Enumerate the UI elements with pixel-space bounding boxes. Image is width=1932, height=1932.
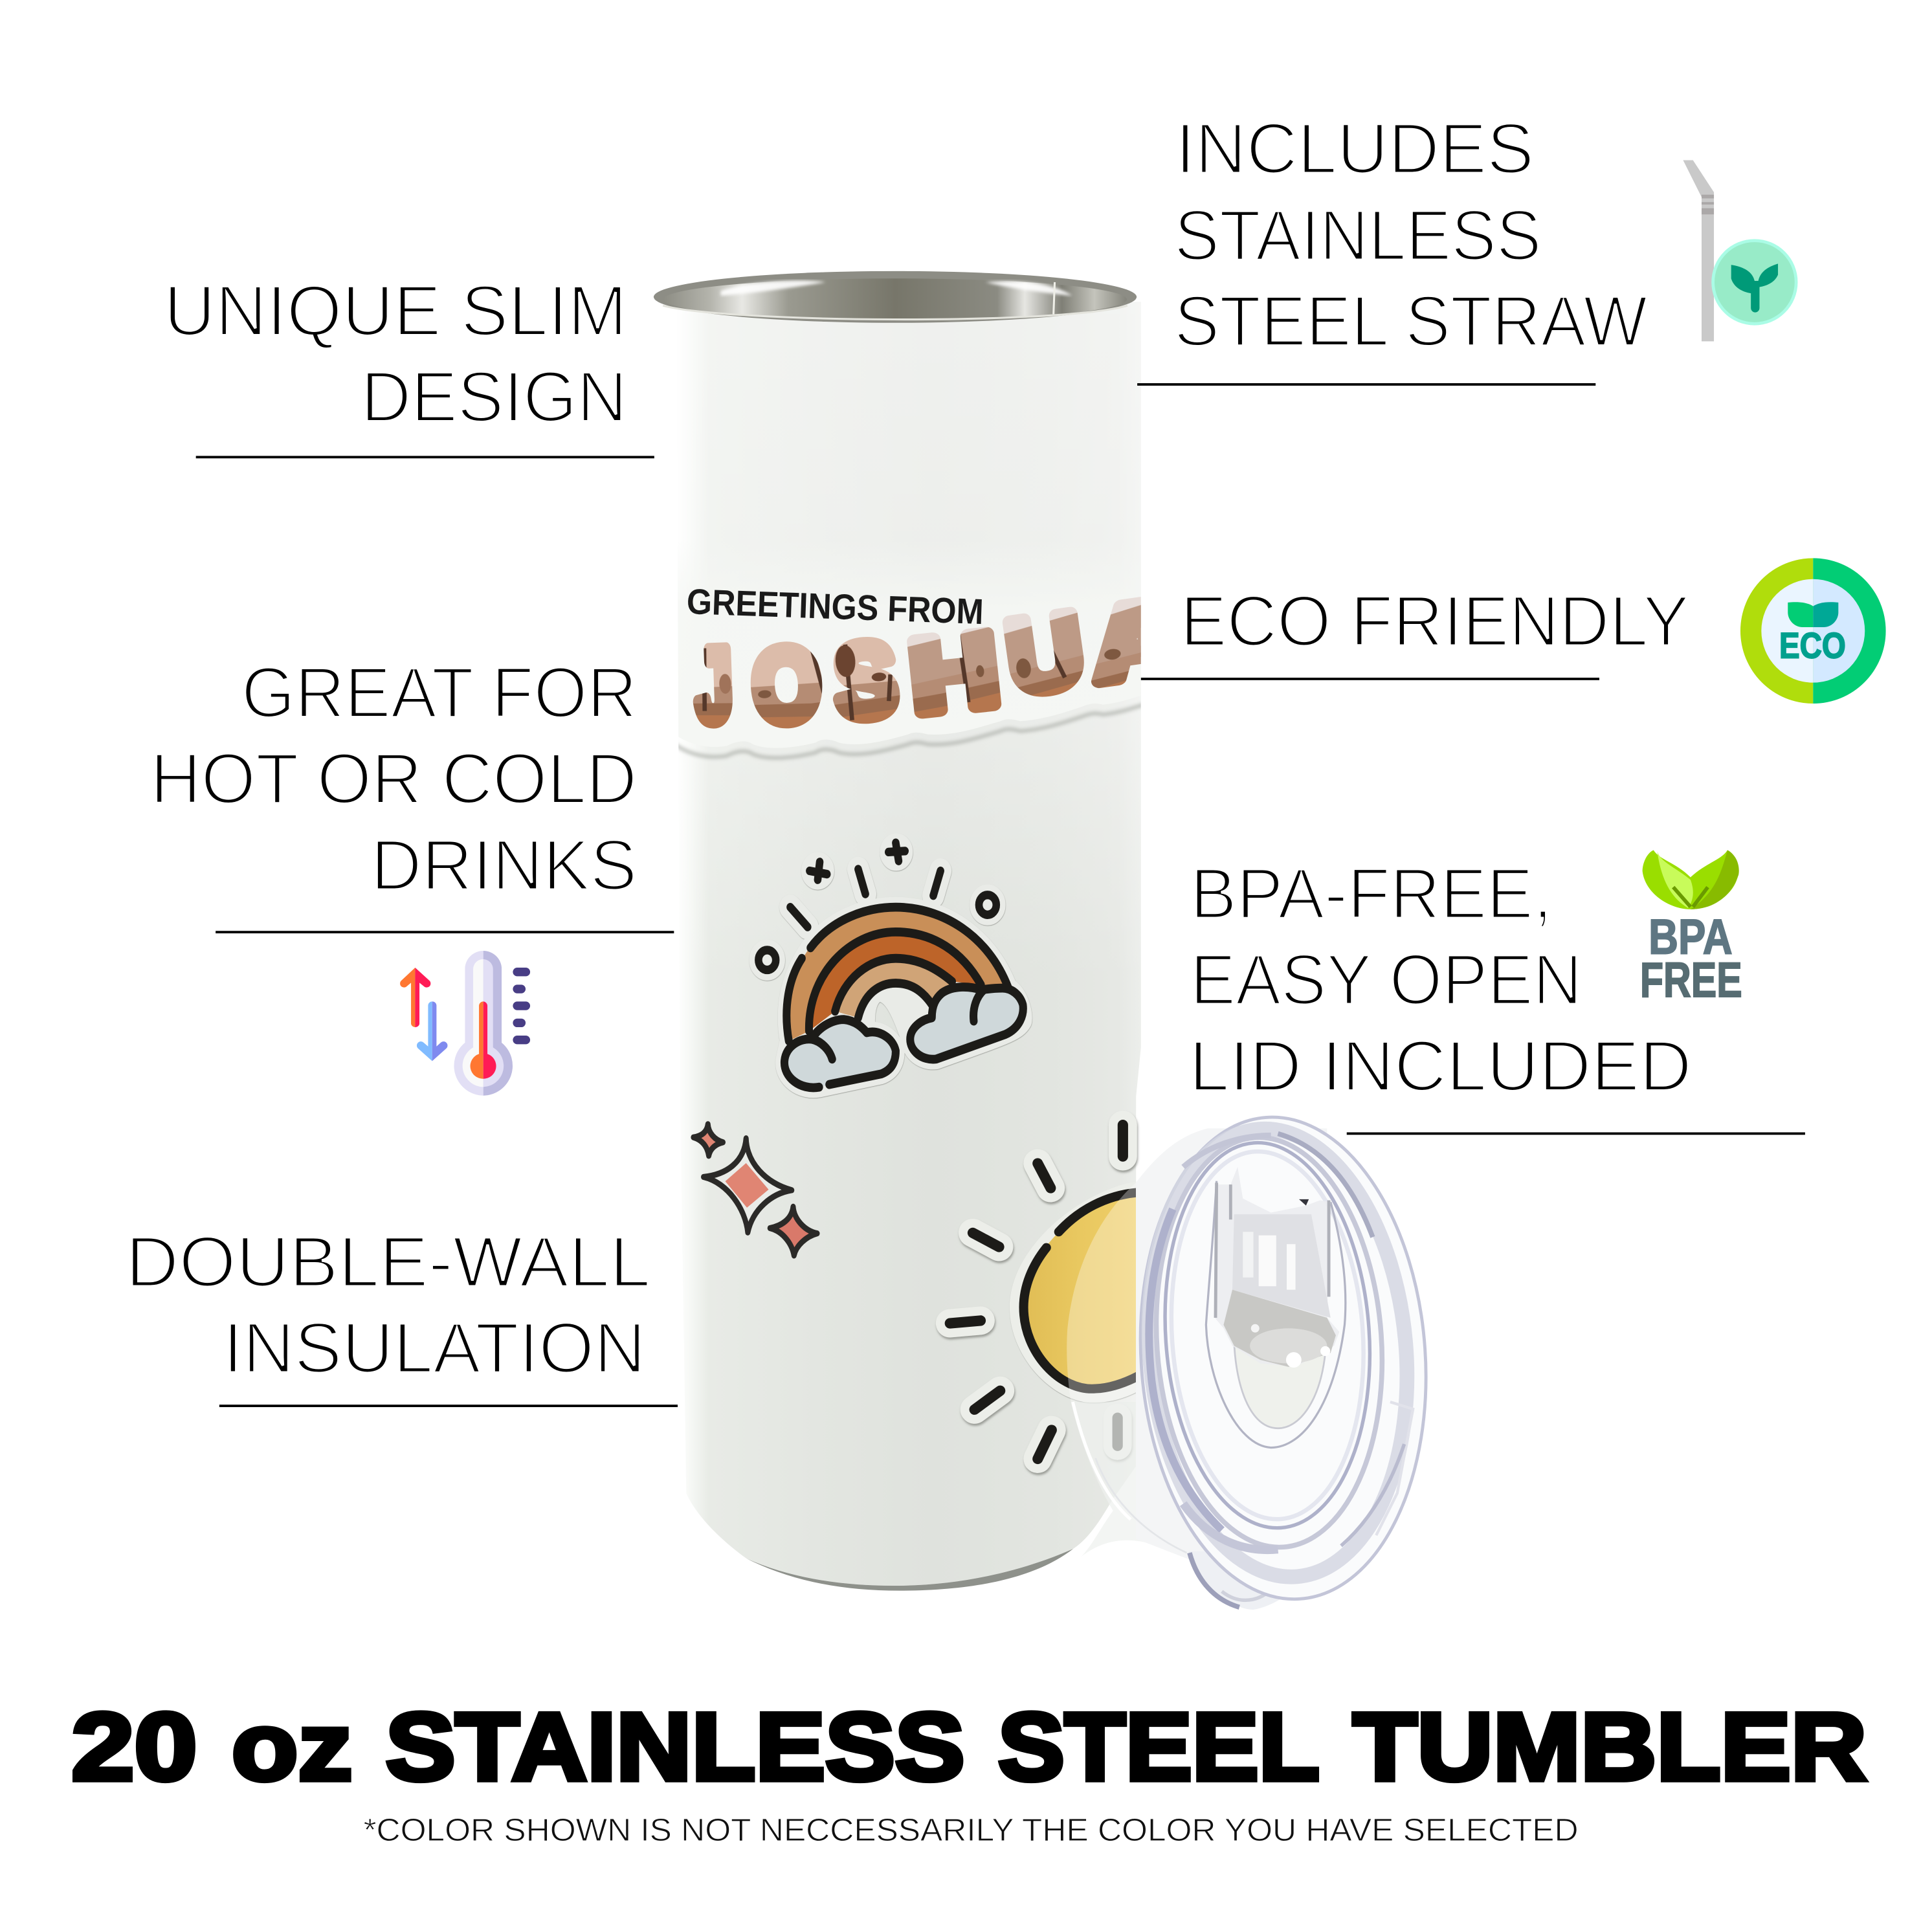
greeting text: GREETINGS FROM [686,581,984,632]
label: double-wall insulation: INSULATION [223,1309,646,1388]
label: unique slim design: UNIQUE SLIM [164,271,627,351]
label: double-wall insulation: DOUBLE-WALL [126,1222,650,1302]
icon: bpa free [1640,850,1742,1008]
label: unique slim design: DESIGN [361,357,627,437]
photo-filled lettering: S [831,621,900,740]
sticker: rainbow [753,837,1023,1087]
label: bpa-free lid [1189,854,1805,1135]
title: STEEL [998,1694,1320,1801]
clear lid [1067,1107,1442,1610]
label: bpa-free lid: LID INCLUDED [1189,1027,1692,1106]
tumbler rim [654,271,1137,323]
label: eco friendly: ECO FRIENDLY [1181,582,1689,661]
title: TUMBLER [1353,1694,1867,1801]
lid side wall [1067,1128,1327,1560]
icon: thermometer [400,951,530,1096]
photo-filled lettering: U [1000,591,1090,715]
rainbow halo [753,837,1023,1087]
label: unique slim design [164,271,654,458]
label: hot or cold: GREAT FOR [241,653,637,733]
photo-filled lettering: J [694,627,734,743]
lid drink opening [1206,1181,1346,1448]
label: bpa-free lid: EASY OPEN [1190,940,1582,1020]
clouds [784,987,1023,1087]
photo-filled lettering: H [905,611,1004,735]
icon: eco badge: ECO [1779,626,1846,666]
label: stainless steel straw: STEEL STRAW [1174,282,1647,361]
title [71,1694,1867,1801]
lid spout [1188,1551,1331,1610]
label: hot or cold: DRINKS [371,825,637,905]
label: hot or cold [150,653,674,933]
lid slider mechanism [1215,1167,1339,1368]
sticker: Greetings from Joshua [678,589,1141,761]
sticker: sun behind lid [950,1125,1159,1459]
sticker band with scalloped edge [678,606,1141,761]
label: bpa-free lid: BPA-FREE, [1190,854,1553,933]
sun rays [950,1125,1123,1459]
icon: bpa free: BPA [1649,909,1733,964]
label: double-wall insulation [126,1222,678,1407]
label: hot or cold: HOT OR COLD [150,739,637,819]
title: oz [232,1694,352,1801]
photo-filled lettering [693,597,1141,729]
title: STAINLESS [386,1694,965,1801]
icon: eco badge [1740,558,1886,704]
icon: bpa free: FREE [1640,953,1742,1008]
title: 20 [71,1694,197,1801]
label: stainless steel straw: INCLUDES [1175,109,1534,188]
icon: straw with sprout [1683,160,1797,341]
photo-filled lettering: A [1083,577,1192,704]
disclaimer: *COLOR SHOWN IS NOT NECCESSARILY THE COLOR YOU HAVE SELECTED [364,1812,1579,1848]
photo-filled lettering: O [750,626,823,744]
tumbler body [654,271,1141,1591]
label: stainless steel straw [1137,109,1647,386]
label: stainless steel straw: STAINLESS [1174,196,1542,276]
sticker: sparkles [693,1124,817,1256]
lid rim rings [1125,1107,1442,1609]
rays, crosses and dots [759,843,996,970]
